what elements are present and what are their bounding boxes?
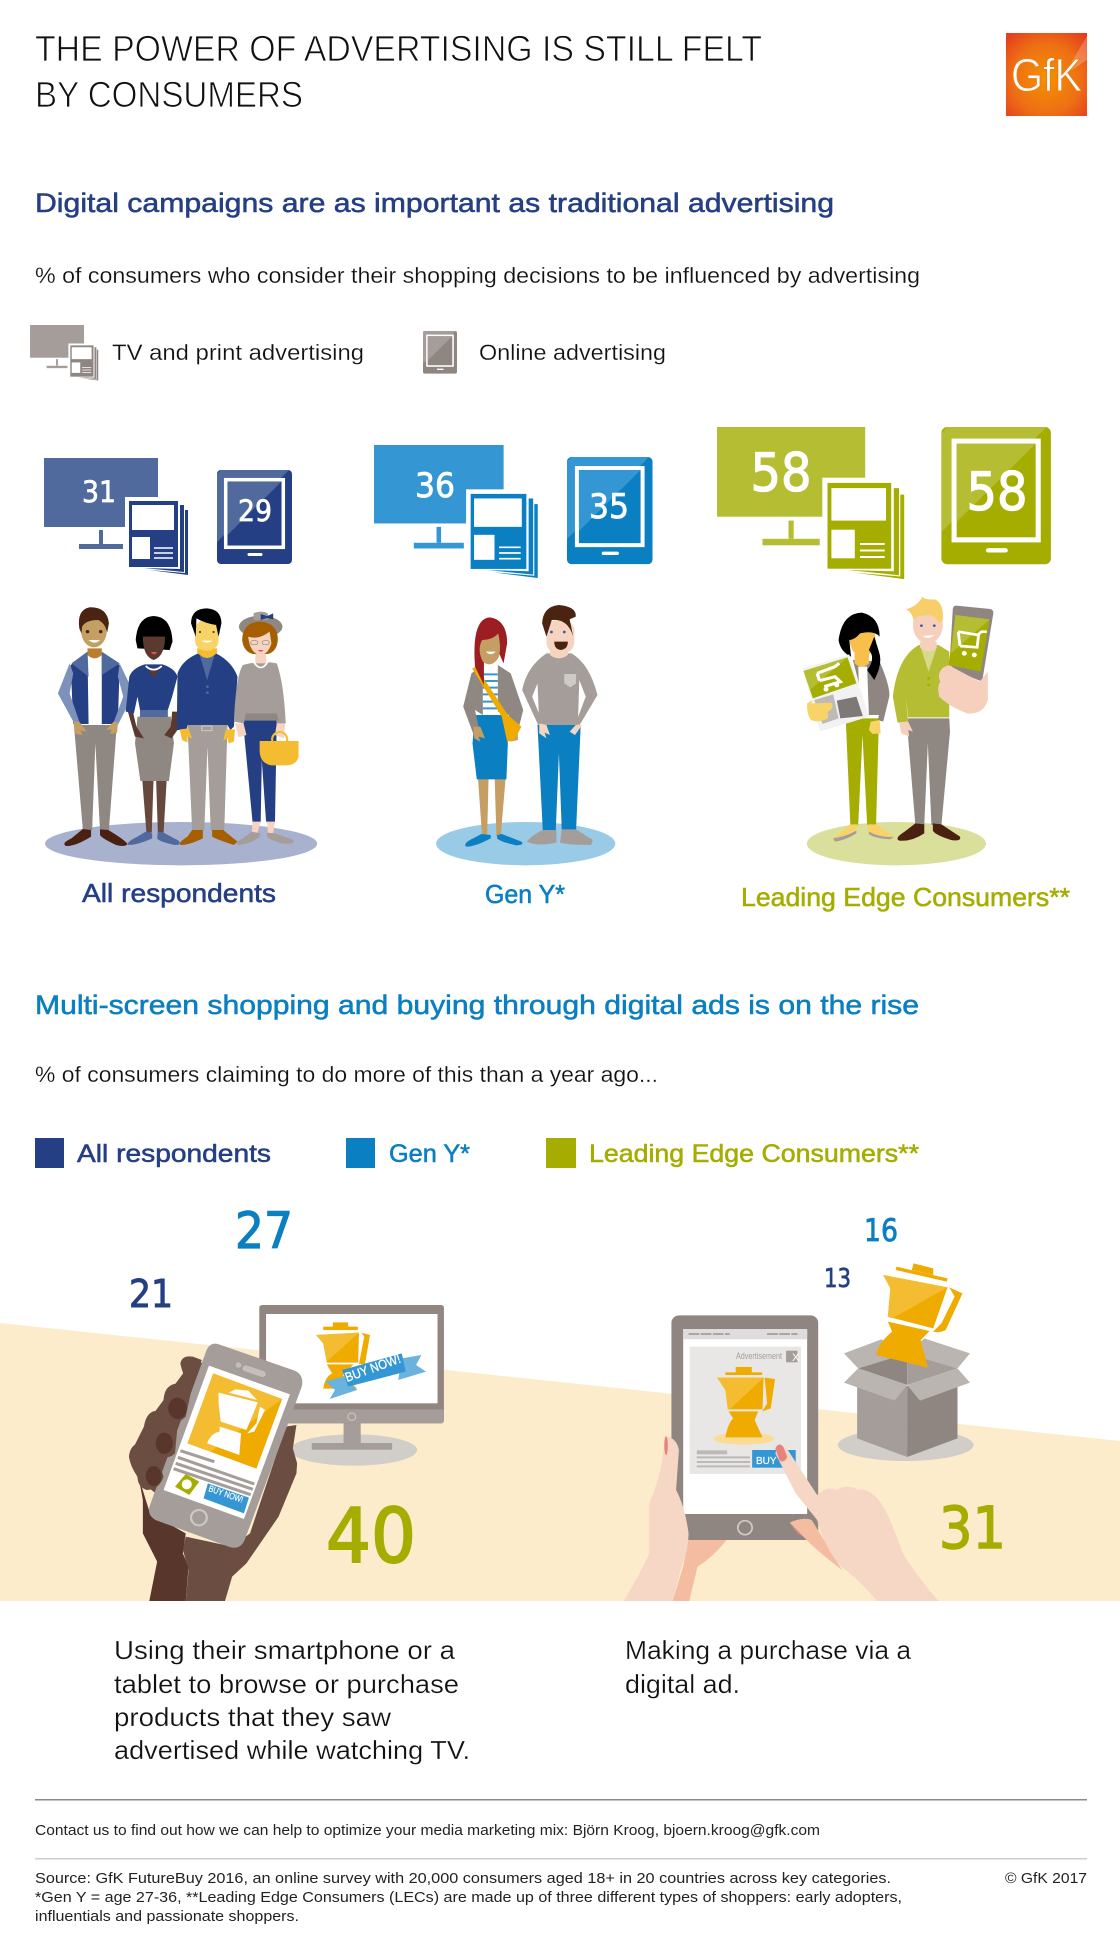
swatch: Gen Y	[346, 1138, 375, 1168]
text: purchase via digital ad: digital ad.	[625, 1669, 740, 1699]
label: all respondents: All respondents	[82, 878, 276, 908]
person: woman in blue top	[126, 616, 180, 845]
swatch: all respondents	[35, 1138, 64, 1168]
person: woman with red hair	[463, 617, 523, 847]
group: Gen Y icons	[374, 445, 652, 580]
tablet	[671, 1315, 818, 1540]
illustration: phone in hand with TV	[129, 1305, 444, 1601]
heading: digital campaigns: Digital campaigns are as important as traditional advertising	[35, 188, 834, 218]
background band: cream slope	[0, 1323, 1120, 1601]
footer: source: *Gen Y = age 27-36, **Leading Edge Consumers (LECs) are made up of three different types of shoppers: early adopters,	[35, 1889, 902, 1906]
open box	[838, 1338, 974, 1461]
illustration: Leading Edge people	[803, 597, 993, 865]
text: smartphone or tablet while watching TV	[114, 1635, 470, 1765]
text: smartphone or tablet while watching TV: Using their smartphone or a	[114, 1635, 456, 1665]
ribbon text: BUY NOW: BUY NOW!	[343, 1351, 403, 1385]
text: smartphone or tablet while watching TV: tablet to browse or purchase	[114, 1669, 459, 1699]
person: woman with hat and bag	[234, 612, 299, 845]
icon: TV and print 31	[44, 458, 190, 577]
logo: GfK	[1006, 33, 1087, 116]
label: Leading Edge Consumers: Leading Edge Consumers**	[741, 882, 1070, 912]
ad label: Advertisement: Advertisement	[736, 1351, 782, 1362]
right hand pointing	[775, 1445, 939, 1601]
hand behind phone	[129, 1360, 297, 1601]
legend label: TV and print: TV and print advertising	[112, 340, 364, 365]
text: purchase via digital ad: Making a purchase via a	[625, 1635, 912, 1665]
number: 31 Leading Edge: 31	[939, 1494, 1006, 1562]
icon: TV and print 58	[717, 427, 907, 582]
footer: source: influentials and passionate shoppers.	[35, 1908, 299, 1925]
text: smartphone or tablet while watching TV: advertised while watching TV.	[114, 1735, 470, 1765]
illustration: all respondents people	[45, 607, 317, 865]
legend label: all respondents: All respondents	[77, 1140, 271, 1168]
phone	[149, 1344, 302, 1548]
ribbon	[325, 1355, 426, 1399]
phone	[949, 606, 993, 682]
swatch: Leading Edge	[546, 1138, 576, 1168]
number: 16 Gen Y: 16	[864, 1213, 898, 1249]
number: 35: 35	[589, 487, 629, 527]
text: purchase via digital ad	[625, 1635, 912, 1699]
icon: tablet 35	[567, 457, 652, 564]
left hand	[624, 1436, 689, 1601]
group: Leading Edge icons	[717, 427, 1051, 582]
legend: media types	[30, 325, 666, 381]
icon: grey tablet	[423, 331, 457, 374]
person: man with beard	[522, 605, 597, 845]
phone button text: BUY NOW: BUY NOW!	[207, 1483, 245, 1505]
footer: source	[35, 1870, 902, 1925]
text: smartphone or tablet while watching TV: products that they saw	[114, 1702, 391, 1732]
legend label: Gen Y: Gen Y*	[389, 1140, 470, 1168]
number: 31: 31	[82, 475, 116, 509]
ground ellipse	[45, 822, 317, 865]
icon: tablet 29	[217, 470, 292, 564]
heading: multi-screen shopping: Multi-screen shopping and buying through digital ads is on the rise	[35, 990, 919, 1020]
title: BY CONSUMERS	[35, 74, 303, 115]
group: all respondents icons	[44, 458, 292, 577]
footer: contact: Contact us to find out how we can help to optimize your media marketing mix: Björn Kroog, bjoern.kroog@gfk.com	[35, 1822, 820, 1839]
person: woman with magazine	[803, 613, 894, 842]
number: 40 Leading Edge: 40	[326, 1492, 416, 1580]
ground ellipse	[436, 822, 615, 865]
title: THE POWER OF ADVERTISING IS STILL FELT	[35, 28, 762, 69]
subtitle: influenced by advertising: % of consumers who consider their shopping decisions to be influenced by advertising	[35, 263, 920, 288]
ad close: X: X	[792, 1352, 800, 1364]
number: 36: 36	[415, 466, 455, 506]
icon: grey TV and print	[30, 325, 99, 381]
footer: copyright: © GfK 2017	[1005, 1870, 1087, 1887]
illustration: Gen Y people	[436, 605, 615, 865]
box front flaps	[844, 1368, 970, 1401]
magazine	[803, 654, 869, 732]
number: 58 on tablet: 58	[966, 462, 1028, 523]
person: man with phone	[893, 597, 993, 841]
number: 13 all respondents: 13	[824, 1264, 851, 1294]
hand behind tablet	[672, 1538, 728, 1601]
ground ellipse	[807, 822, 986, 865]
icon: TV and print 36	[374, 445, 540, 580]
footer: source: Source: GfK FutureBuy 2016, an online survey with 20,000 consumers aged 18+ in 20 countries across key categories.	[35, 1870, 891, 1887]
icon: tablet 58	[941, 427, 1051, 564]
blender on monitor	[323, 1322, 358, 1330]
blender flying out of box	[876, 1263, 962, 1368]
monitor	[259, 1305, 444, 1466]
person: man in vest	[58, 607, 134, 846]
number: 21 all respondents: 21	[129, 1272, 173, 1316]
legend label: online: Online advertising	[479, 340, 666, 365]
logo: GfK: GfK	[1011, 49, 1082, 101]
number: 27 Gen Y: 27	[235, 1202, 293, 1260]
subtitle: more than a year ago: % of consumers claiming to do more of this than a year ago...	[35, 1062, 658, 1087]
legend label: Leading Edge: Leading Edge Consumers**	[589, 1140, 919, 1168]
illustration: tablet purchase with box	[624, 1263, 974, 1601]
number: 58 on TV: 58	[750, 443, 812, 504]
legend: audience colours	[35, 1138, 919, 1168]
label: Gen Y: Gen Y*	[485, 879, 565, 909]
fingers	[129, 1356, 202, 1490]
title	[35, 28, 762, 115]
person: man in blue jacket	[177, 608, 237, 845]
ad button: BUY: BUY	[756, 1456, 777, 1467]
number: 29: 29	[238, 494, 272, 528]
